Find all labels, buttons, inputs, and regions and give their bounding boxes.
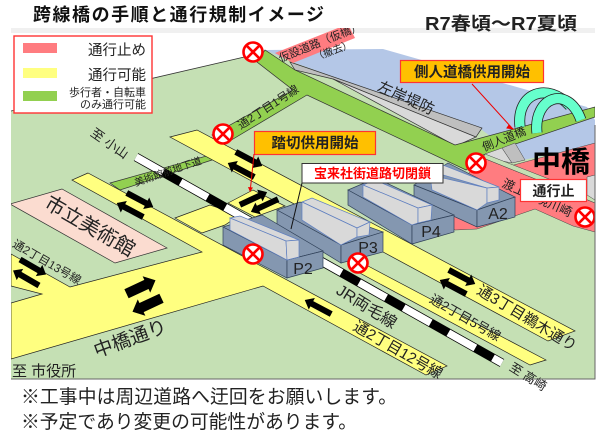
city art museum: 市立美術館 (41, 191, 139, 261)
road and place labels: 中橋通り (91, 316, 170, 362)
pier P3 (277, 198, 383, 263)
title: 跨線橋の手順と通行規制イメージ (33, 5, 324, 25)
road and place labels: 美術館前地下道 (133, 154, 203, 189)
callout: Horaisha street crossing closure (291, 164, 443, 229)
pier labels: A2 (488, 206, 508, 223)
yellow roads (11, 130, 575, 375)
green footpath roads (110, 50, 595, 190)
side footbridge arches (520, 93, 581, 133)
road and place labels: 通2丁目12号線 (350, 318, 445, 383)
city art museum (10, 189, 167, 263)
note line two: ※予定であり変更の可能性があります。 (21, 411, 357, 432)
road and place labels: 至 市役所 (12, 363, 76, 380)
pier labels: P3 (358, 240, 378, 257)
road and place labels: （撤去） (312, 39, 354, 63)
road and place labels: 側人道橋 (480, 124, 528, 154)
road and place labels: 仮設道路（仮橋） (277, 19, 363, 65)
callout: crossing opening (248, 132, 376, 192)
map bottom and right border (11, 125, 595, 379)
road and place labels: 渡上町境川崎 (500, 176, 575, 220)
callout: side footbridge opening (400, 60, 544, 129)
left bank embankment (290, 62, 482, 146)
road and place labels: 通2丁目5号線 (427, 291, 503, 344)
legend (14, 36, 152, 113)
bridge piers (223, 163, 515, 278)
road and place labels (10, 19, 580, 383)
legend: のみ通行可能 (80, 97, 146, 111)
road and place labels: JR両毛線 (333, 281, 400, 332)
destination label: Takasaki: 至 高崎 (507, 359, 550, 394)
callout: Horaisha street crossing closure: 宝来社街道路切閉鎖 (314, 166, 431, 181)
JR Ryomo line rail (136, 157, 502, 363)
temporary road (275, 28, 355, 63)
pier labels: P2 (293, 261, 313, 278)
legend: 通行止め (88, 42, 146, 59)
road and place labels: 通2丁目1号線 (235, 83, 302, 132)
callout: side footbridge opening: 側人道橋供用開始 (414, 63, 530, 81)
callout: crossing opening: 踏切供用開始 (272, 134, 359, 152)
legend: 歩行者・自転車 (69, 85, 146, 99)
note line one: ※工事中は周辺道路へ迂回をお願いします。 (21, 386, 397, 407)
Nakabashi bridge name: 中橋 (532, 146, 590, 179)
pier labels (293, 206, 508, 278)
legend: 通行可能 (88, 67, 146, 84)
two-way arrows (10, 146, 478, 320)
pier P2 (223, 215, 323, 278)
road and place labels: 左岸堤防 (375, 78, 437, 118)
road and place labels: 至 小山 (88, 125, 131, 162)
period label: R7春頃～R7夏頃 (425, 14, 577, 34)
Nakabashi bridge deck (454, 142, 594, 232)
pier P4 (348, 178, 454, 244)
closure markers (214, 42, 594, 272)
road and place labels: 通2丁目13号線 (10, 238, 84, 287)
callout: closed to traffic (520, 180, 586, 202)
river (265, 49, 595, 160)
callout: closed to traffic: 通行止 (532, 183, 574, 199)
road and place labels: 通3丁目鵜木通り (474, 282, 580, 355)
pier labels: P4 (421, 224, 441, 241)
pier A2 (414, 163, 515, 227)
